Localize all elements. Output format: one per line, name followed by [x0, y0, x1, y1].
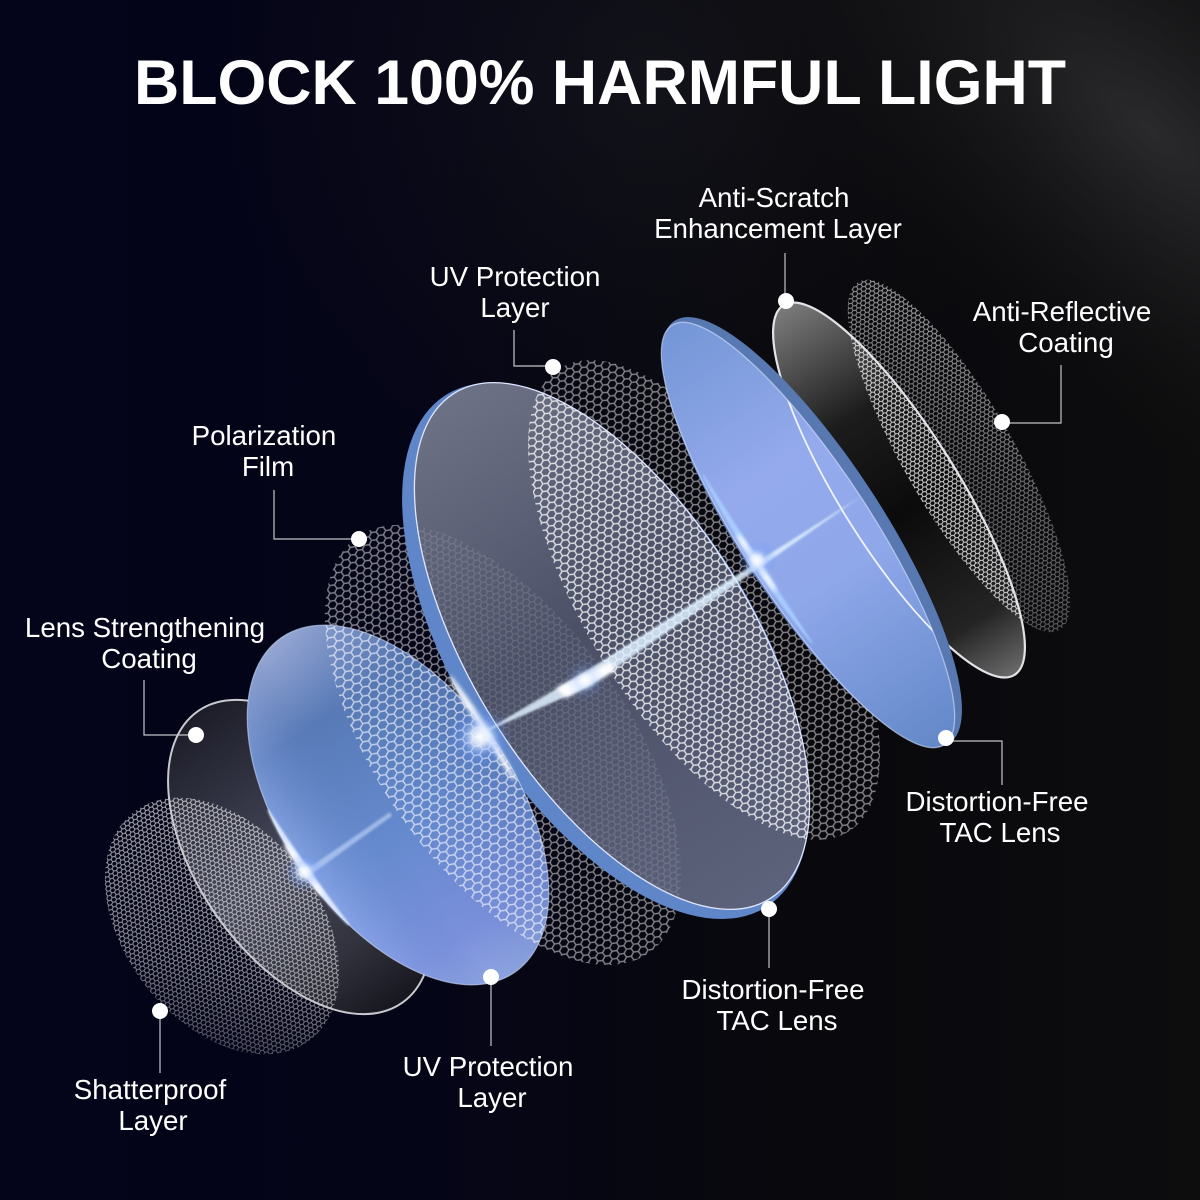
label: UV Protection Layer (bottom)	[403, 969, 573, 1113]
label: Shatterproof Layer	[74, 1003, 226, 1136]
label: UV Protection Layer (top)	[430, 261, 600, 375]
layer: distortion-free TAC lens (large)	[402, 382, 810, 919]
layer: distortion-free TAC lens (rear)	[660, 317, 962, 748]
label: Shatterproof Layer: Layer	[118, 1105, 188, 1136]
light flare beams	[268, 475, 860, 925]
label: UV Protection Layer (bottom): UV Protection	[403, 1051, 573, 1082]
label: Anti-Scratch Enhancement Layer: Anti-Scratch	[699, 182, 849, 213]
label: Lens Strengthening Coating: Coating	[101, 643, 197, 674]
label: Anti-Reflective Coating	[973, 296, 1151, 430]
label: Polarization Film: Polarization	[192, 420, 336, 451]
layer: UV protection mesh (rear)	[459, 306, 949, 894]
title: BLOCK 100% HARMFUL LIGHT	[134, 48, 1066, 118]
label: Distortion-Free TAC Lens (bottom): Distortion-Free	[681, 974, 865, 1005]
label: Distortion-Free TAC Lens (bottom)	[681, 901, 865, 1036]
label: Lens Strengthening Coating	[25, 612, 265, 743]
label: Anti-Reflective Coating: Coating	[1018, 327, 1114, 358]
label: Distortion-Free TAC Lens (right)	[905, 730, 1089, 848]
label: Distortion-Free TAC Lens (right): Distortion-Free	[905, 786, 1089, 817]
label: UV Protection Layer (top): UV Protection	[430, 261, 600, 292]
label: Anti-Scratch Enhancement Layer: Enhancement Layer	[654, 213, 902, 244]
label: Anti-Scratch Enhancement Layer	[654, 182, 902, 309]
layer: UV protection lens (front)	[246, 624, 550, 986]
label: Lens Strengthening Coating: Lens Strengthening	[25, 612, 265, 643]
label: Polarization Film: Film	[242, 451, 294, 482]
label: Distortion-Free TAC Lens (right): TAC Lens	[939, 817, 1061, 848]
layer: anti-reflective coating mesh	[848, 280, 1070, 632]
label: Shatterproof Layer: Shatterproof	[74, 1074, 226, 1105]
label: UV Protection Layer (bottom): Layer	[457, 1082, 527, 1113]
layer: shatterproof mesh	[104, 698, 425, 1054]
label: Anti-Reflective Coating: Anti-Reflective	[973, 296, 1151, 327]
layer: polarization film mesh	[255, 465, 751, 1025]
label: UV Protection Layer (top): Layer	[480, 292, 550, 323]
layer: lens strengthening coating	[114, 653, 486, 1061]
label: Polarization Film	[192, 420, 367, 547]
label: Distortion-Free TAC Lens (bottom): TAC Lens	[716, 1005, 838, 1036]
layer: anti-scratch enhancement lens	[772, 301, 1026, 679]
